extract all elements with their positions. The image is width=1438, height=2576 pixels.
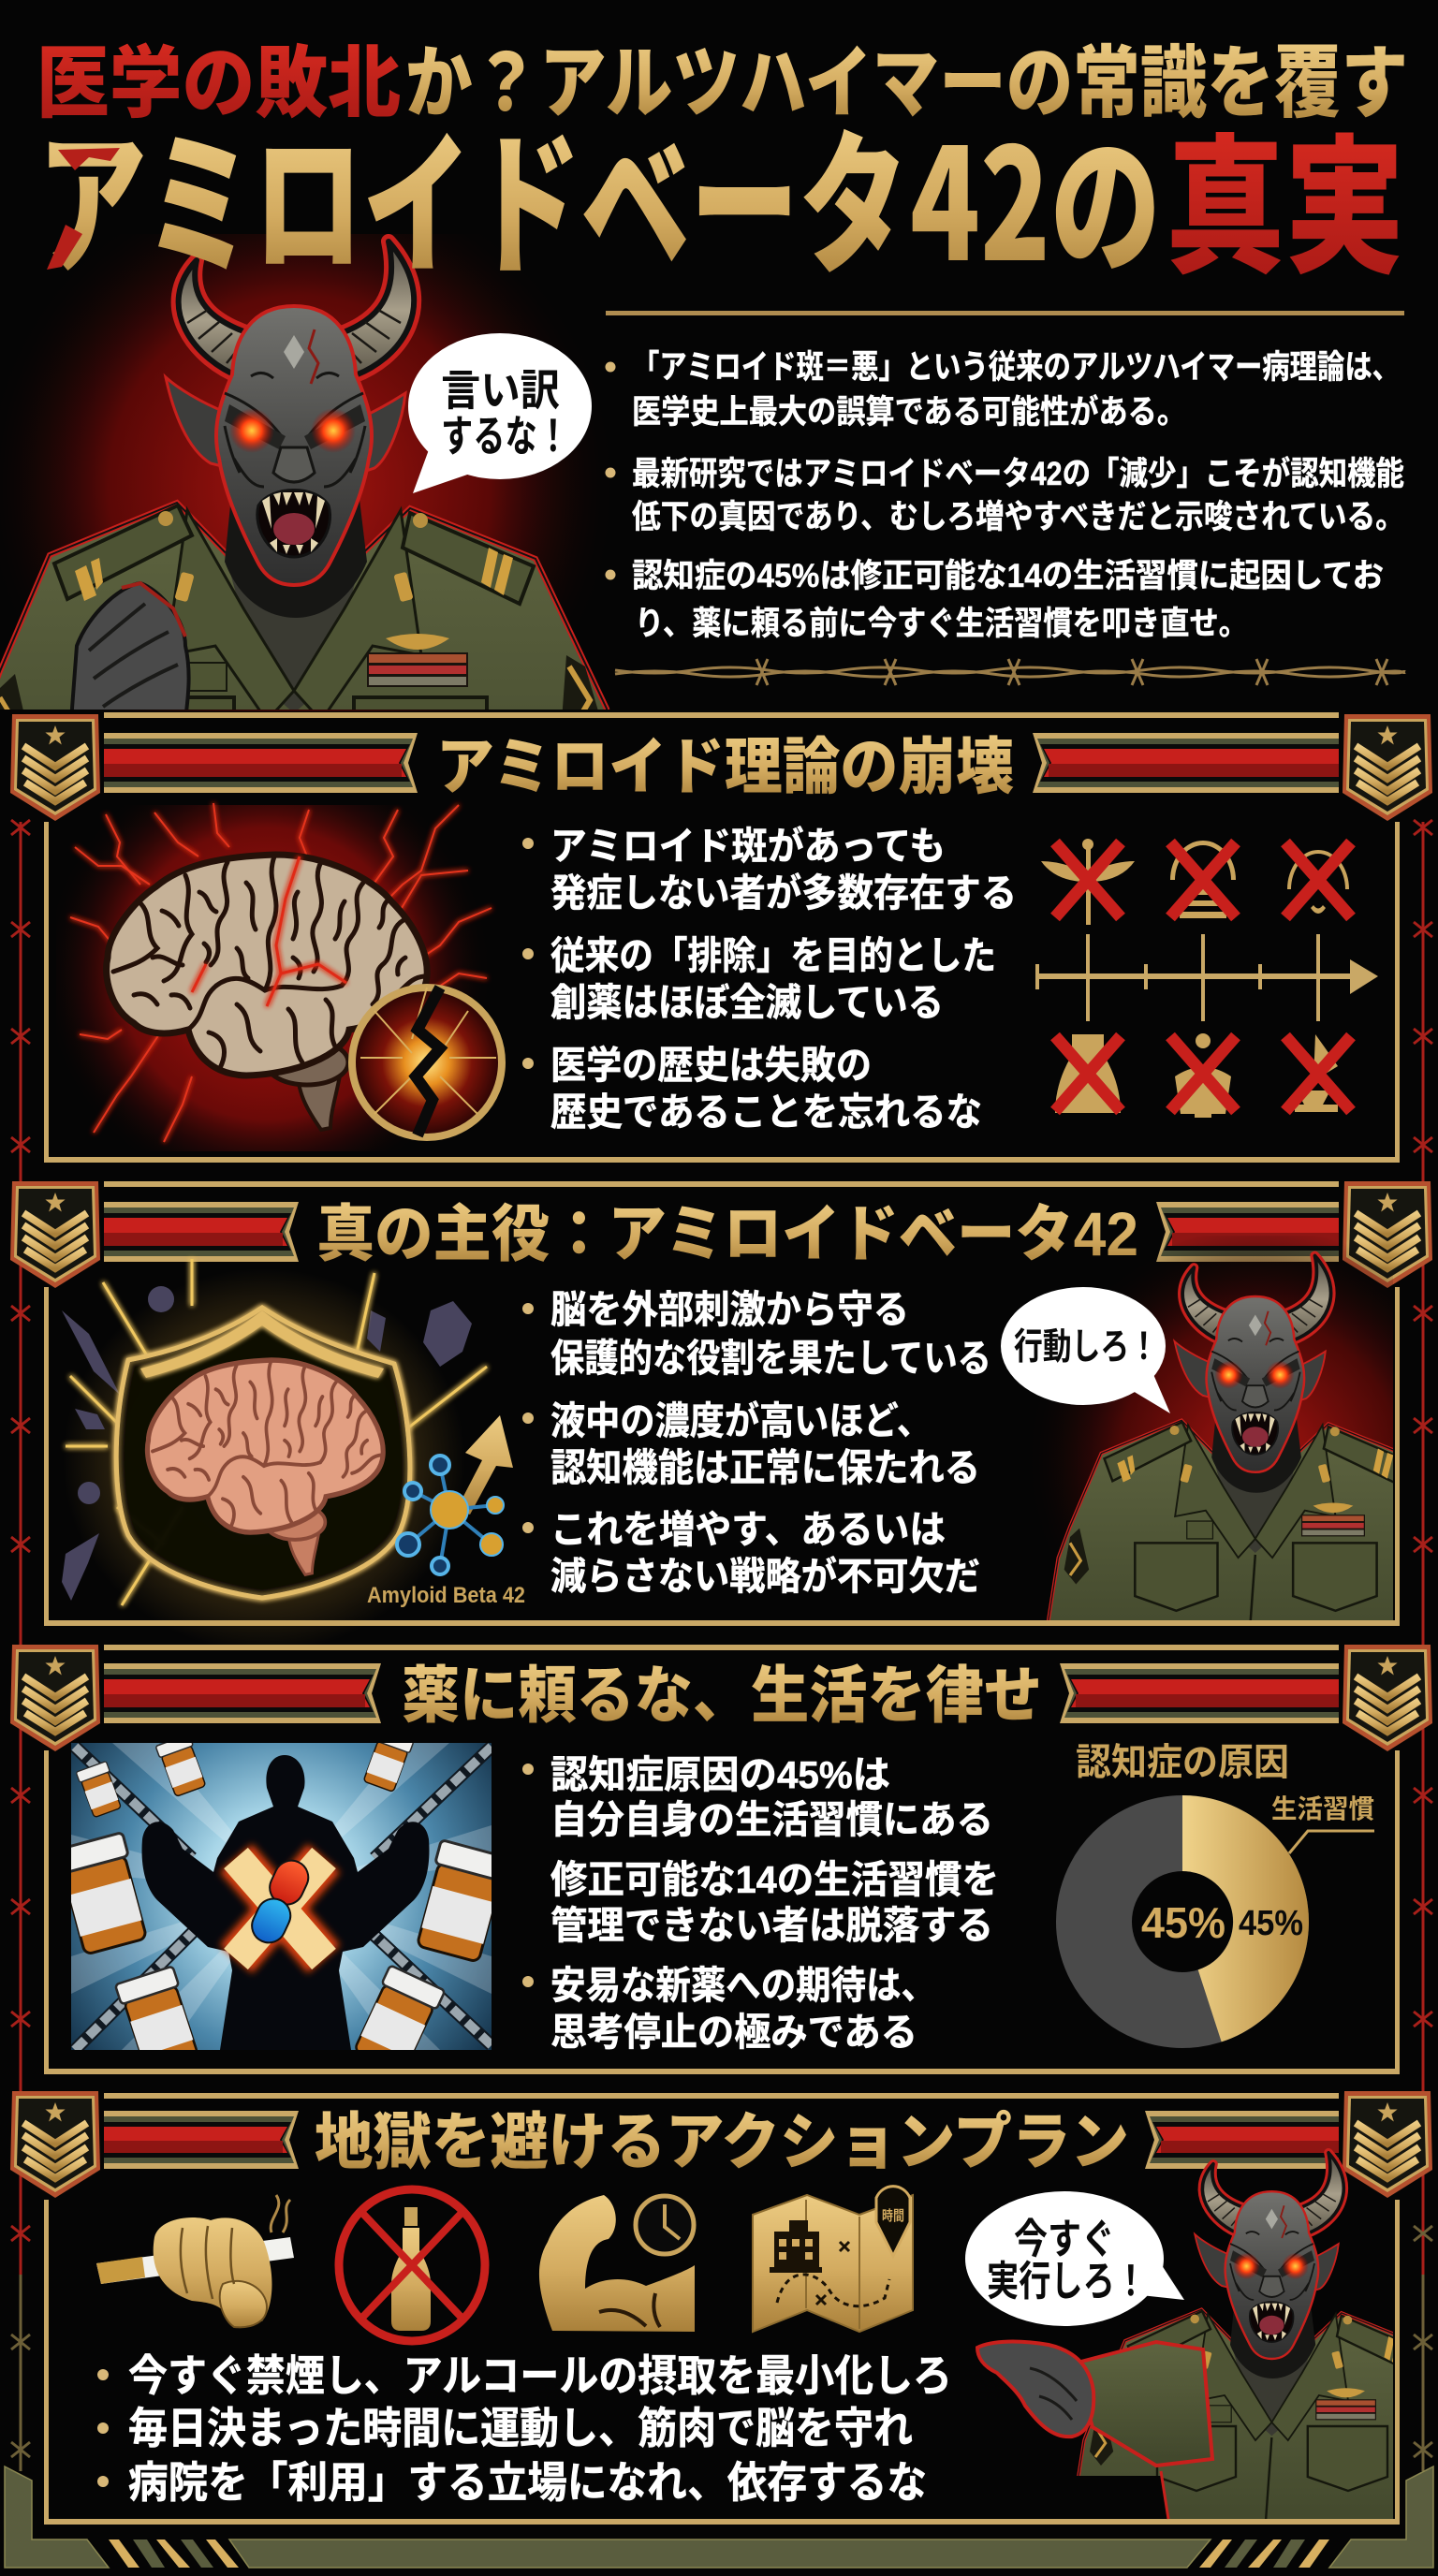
banner left — [104, 1202, 299, 1262]
slice label: 生活習慣 — [1271, 1794, 1374, 1823]
badge right — [1343, 1181, 1432, 1288]
chart title: 認知症の原因 — [1076, 1742, 1289, 1783]
demon officer 3 pointing — [976, 2148, 1393, 2520]
barbed wire divider — [615, 659, 1404, 685]
demon officer 2 — [1047, 1236, 1393, 1620]
bullet text: protagonist: 保護的な役割を果たしている — [550, 1337, 991, 1380]
side barbed wires — [11, 820, 1432, 2275]
panel frame — [44, 1645, 1400, 2074]
center value: 45% — [1141, 1898, 1225, 1947]
bullet text: collapse: 従来の「排除」を目的とした — [550, 934, 996, 977]
slice value: 45% — [1239, 1904, 1303, 1943]
icon: no alcohol — [339, 2189, 485, 2341]
bullet text: collapse: 歴史であることを忘れるな — [550, 1090, 982, 1134]
bullet text: action: 今すぐ禁煙し、アルコールの摂取を最小化しろ — [128, 2351, 952, 2400]
banner right — [1033, 733, 1339, 793]
donut lifestyle segment — [1182, 1795, 1309, 2042]
demon officer with fist — [0, 234, 610, 711]
panel frame — [44, 712, 1400, 1163]
bullet text: lifestyle: 管理できない者は脱落する — [550, 1904, 993, 1947]
bullet text: action: 病院を「利用」する立場になれ、依存するな — [128, 2458, 927, 2507]
title line 2: の — [1050, 124, 1161, 292]
bullet text: action — [97, 2351, 952, 2507]
donut chart: causes of dementia — [1076, 1742, 1374, 2042]
icon: hospital map — [753, 2187, 913, 2332]
panel: collapse of amyloid theory — [10, 712, 1432, 1163]
speech bubble: do it now — [965, 2191, 1184, 2326]
badge right — [1343, 1645, 1432, 1751]
speech bubble: do it now: 実行しろ！ — [987, 2259, 1147, 2305]
icon: fist crushing cigarette — [96, 2195, 294, 2327]
badge left — [10, 714, 100, 821]
summary bullets: 医学史上最大の誤算である可能性がある。 — [632, 394, 1186, 431]
bullet text: lifestyle — [522, 1753, 999, 2054]
bullet text: protagonist: 液中の濃度が高いほど、 — [550, 1399, 932, 1442]
bullet text: collapse: アミロイド斑があっても — [550, 825, 946, 868]
title line 2: アミロイドベータ — [37, 121, 908, 293]
heading: 真の主役：アミロイドベータ42 — [316, 1199, 1138, 1268]
title line 1: 医学の敗北 — [37, 39, 401, 127]
bullet text: protagonist: 脳を外部刺激から守る — [550, 1288, 909, 1331]
icon: cracked coin — [352, 988, 502, 1137]
banner left — [104, 2111, 299, 2169]
panel: do not rely on drugs — [10, 1645, 1432, 2074]
gold divider — [606, 311, 1404, 315]
speech bubble: act: 行動しろ！ — [1014, 1327, 1158, 1368]
caption: Amyloid Beta 42 — [367, 1583, 525, 1608]
speech bubble: excuse: 言い訳 — [441, 366, 560, 415]
summary bullets — [605, 349, 1404, 642]
banner right — [1060, 1663, 1339, 1723]
banner right — [1145, 2111, 1339, 2169]
panel: action plan — [10, 2091, 1438, 2547]
illustration: shielded brain — [62, 1259, 487, 1652]
title line 2 — [37, 81, 1404, 305]
bullet text: lifestyle: 修正可能な14の生活習慣を — [550, 1858, 999, 1901]
badge right — [1343, 2091, 1432, 2198]
leader line — [1289, 1831, 1374, 1853]
badge left — [10, 1645, 100, 1751]
illustration: cracked brain — [56, 803, 496, 1151]
footer military band — [5, 2466, 1433, 2568]
speech bubble: act — [1001, 1287, 1170, 1413]
timeline arrow — [1035, 934, 1378, 1021]
speech bubble: excuse: するな！ — [441, 412, 569, 461]
heading: 薬に頼るな、生活を律せ — [402, 1661, 1042, 1730]
heading: 地獄を避けるアクションプラン — [315, 2107, 1129, 2176]
bullet text: protagonist: 減らさない戦略が不可欠だ — [550, 1555, 980, 1598]
bullet text: lifestyle: 自分自身の生活習慣にある — [550, 1798, 993, 1841]
badge left — [10, 1181, 100, 1288]
summary bullets: り、薬に頼る前に今すぐ生活習慣を叩き直せ。 — [635, 606, 1248, 642]
bullet text: collapse: 発症しない者が多数存在する — [550, 871, 1017, 915]
bullet text: protagonist: 認知機能は正常に保たれる — [550, 1446, 980, 1489]
bullet text: lifestyle: 思考停止の極みである — [550, 2011, 917, 2054]
bullet text: collapse: 創薬はほぼ全滅している — [550, 981, 944, 1024]
donut rest segment — [1093, 1833, 1271, 2011]
icon: molecule with up arrow — [397, 1415, 513, 1574]
bullet text: collapse — [522, 825, 1017, 1134]
title line 2: 42 — [910, 81, 1050, 305]
bullet text: collapse: 医学の歴史は失敗の — [550, 1044, 872, 1087]
panel frame — [44, 2093, 1400, 2525]
banner right — [1156, 1202, 1339, 1262]
bullet text: action: 毎日決まった時間に運動し、筋肉で脳を守れ — [128, 2404, 913, 2452]
icon: hospital map: 時間 — [882, 2208, 904, 2224]
bullet text: protagonist — [522, 1288, 991, 1598]
bullet text: lifestyle: 安易な新薬への期待は、 — [550, 1964, 936, 2007]
badge left — [10, 2091, 100, 2198]
panel frame — [44, 1181, 1400, 1626]
badge right — [1343, 714, 1432, 821]
speech bubble: do it now: 今すぐ — [1014, 2217, 1115, 2262]
panel: true protagonist — [10, 1181, 1438, 1670]
illustration: breaking chains — [71, 1743, 492, 2050]
bullet text: protagonist: これを増やす、あるいは — [550, 1508, 946, 1551]
heading: アミロイド理論の崩壊 — [436, 732, 1014, 801]
icon: flexed arm with clock — [539, 2195, 695, 2332]
panel: hero with title — [0, 42, 1406, 711]
speech bubble: excuse — [408, 333, 592, 493]
crossed-out treatment icons — [1041, 839, 1351, 1118]
banner left — [104, 733, 418, 793]
banner left — [104, 1663, 381, 1723]
bullet text: lifestyle: 認知症原因の45%は — [550, 1753, 890, 1796]
summary bullets: 認知症の45%は修正可能な14の生活習慣に起因してお — [632, 558, 1384, 594]
